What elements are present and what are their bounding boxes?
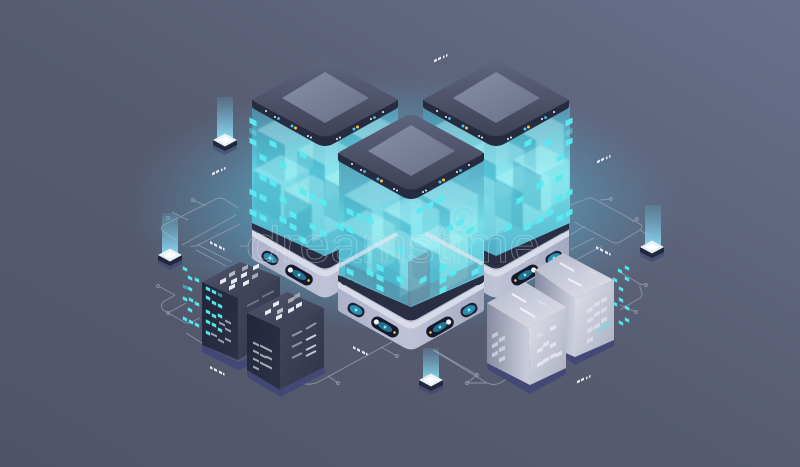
white server back [535, 253, 614, 357]
right base [423, 223, 569, 298]
left slab [252, 62, 398, 146]
light pad top left [213, 97, 237, 155]
side data tiles left [183, 266, 199, 328]
circuit lines right [570, 198, 650, 314]
glowing band edges [337, 233, 483, 267]
blue glow [125, 75, 685, 335]
dark server front [247, 292, 324, 390]
data column right [423, 104, 572, 256]
right slab [423, 62, 569, 146]
data column center [336, 156, 484, 307]
left base [252, 223, 398, 298]
center base [338, 275, 484, 350]
white server front [487, 282, 566, 385]
side data tiles right [613, 265, 629, 326]
watermark: dreamstime [250, 217, 540, 273]
light pad bottom [419, 348, 443, 395]
server shadows [202, 340, 614, 397]
data column left [250, 104, 398, 256]
circuit lines bottom [300, 342, 510, 384]
center slab [338, 114, 484, 199]
dark server back [202, 262, 280, 360]
light pad left [158, 213, 182, 270]
light pad right [640, 205, 664, 262]
circuit lines left [156, 198, 276, 345]
small data marks [210, 54, 610, 384]
